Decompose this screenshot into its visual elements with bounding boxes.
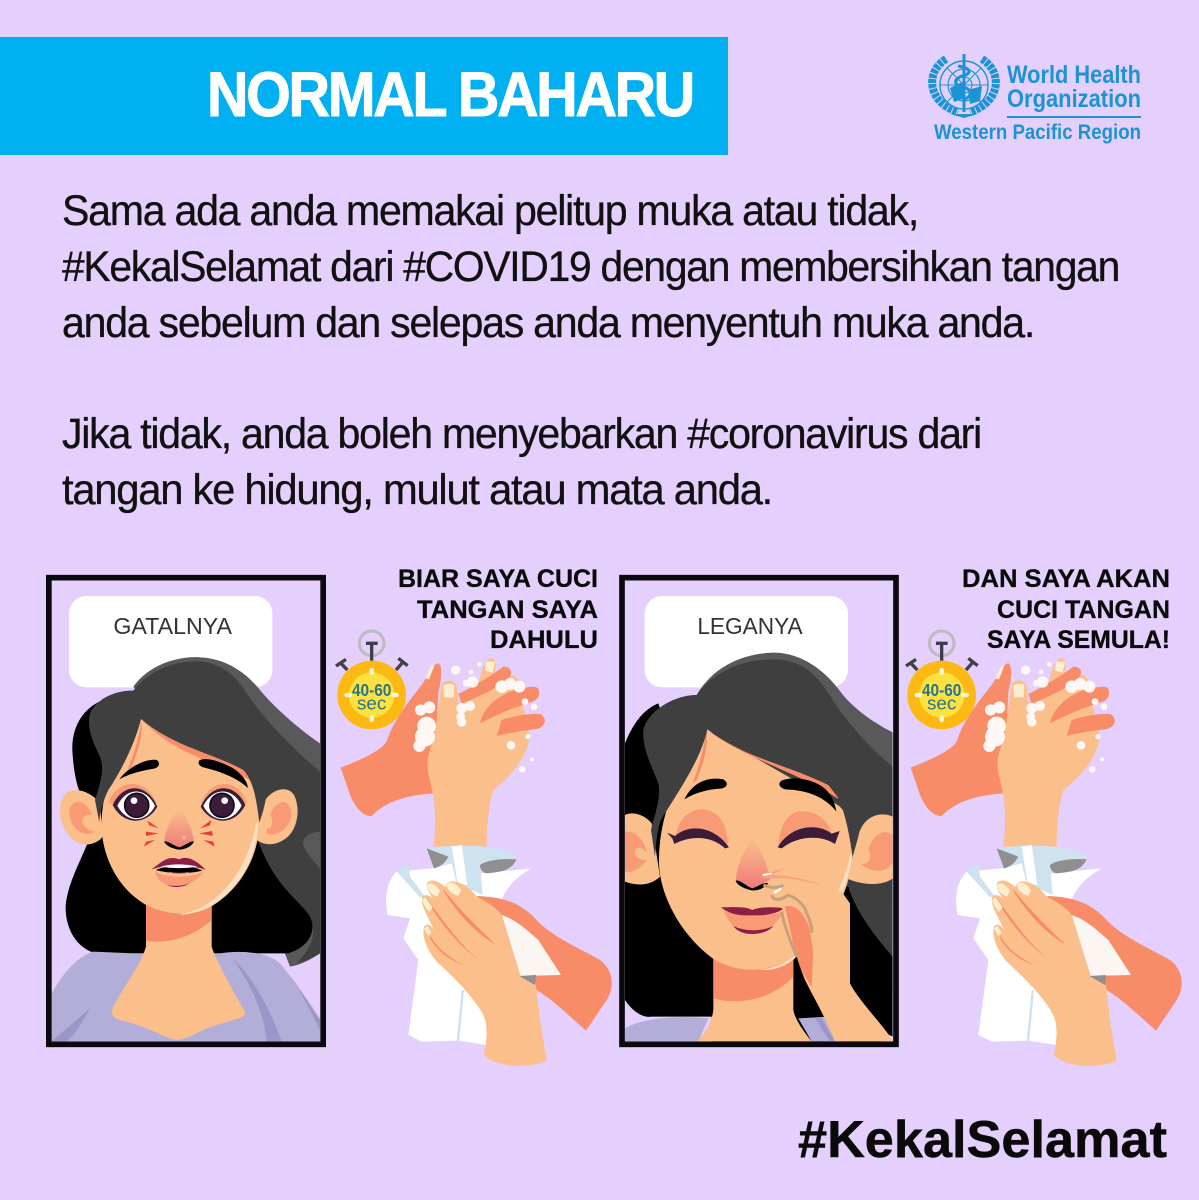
nose — [736, 844, 770, 890]
front hair — [643, 695, 868, 857]
speech bubble: GATALNYA — [113, 613, 233, 639]
icon: WHO emblem — [932, 54, 996, 118]
logo text: Organization — [1007, 85, 1141, 113]
caption: wash first: BIAR SAYA CUCI — [398, 565, 598, 593]
icon: timer: 40-60 — [352, 680, 391, 700]
caption: wash again: DAN SAYA AKAN — [962, 565, 1170, 593]
caption: wash first: TANGAN SAYA — [417, 596, 598, 624]
panel: relieved face — [622, 578, 896, 1044]
frame — [49, 578, 323, 1044]
body text — [62, 187, 1119, 514]
smile — [721, 907, 784, 934]
icon: timer — [336, 631, 408, 729]
caption: wash again: SAYA SEMULA! — [987, 626, 1170, 654]
icon: handwashing and drying, first — [336, 631, 612, 1066]
hair — [66, 657, 320, 967]
ears — [60, 789, 298, 844]
WHO logo — [932, 54, 1141, 144]
logo text: Western Pacific Region — [934, 121, 1141, 144]
panel: itchy face — [49, 578, 323, 1044]
hand touching nose — [762, 867, 893, 1041]
speech bubble — [645, 596, 848, 687]
eyebrows — [684, 778, 836, 811]
hashtag: #KekalSelamat — [798, 1111, 1167, 1169]
nose — [164, 813, 194, 850]
body text: Sama ada anda memakai pelitup muka atau tidak, — [62, 187, 918, 235]
caption: wash again: CUCI TANGAN — [997, 596, 1170, 624]
title: NORMAL BAHARU — [207, 60, 693, 130]
speech bubble — [69, 596, 272, 687]
speech bubble: LEGANYA — [697, 613, 803, 639]
neck and shirt — [52, 903, 320, 1041]
frame — [622, 578, 896, 1044]
eyes — [108, 784, 247, 821]
caption: wash first: DAHULU — [490, 626, 598, 654]
ears — [625, 813, 893, 884]
title banner — [0, 37, 728, 155]
hair — [625, 653, 893, 1041]
face — [659, 729, 852, 970]
icon: timer: sec — [927, 692, 956, 713]
icon: timer: sec — [357, 692, 386, 713]
logo text: World Health — [1007, 61, 1141, 89]
icon: timer: 40-60 — [922, 680, 961, 700]
body text: #KekalSelamat dari #COVID19 dengan membersihkan tangan — [62, 243, 1119, 291]
front hair — [89, 690, 268, 822]
caption: wash again — [962, 565, 1170, 654]
body text: Jika tidak, anda boleh menyebarkan #coronavirus dari — [62, 410, 981, 458]
caption: wash first — [398, 565, 598, 654]
itch marks — [144, 820, 215, 847]
body text: tangan ke hidung, mulut atau mata anda. — [62, 466, 772, 514]
closed eyes — [667, 809, 840, 848]
body text: anda sebelum dan selepas anda menyentuh muka anda. — [62, 299, 1034, 347]
neck and shirt — [625, 953, 893, 1041]
eyebrows — [119, 759, 248, 788]
face — [102, 719, 259, 914]
icon: handwashing and drying, second — [906, 631, 1182, 1066]
logo text — [934, 61, 1141, 144]
icon: timer — [906, 631, 978, 729]
mouth — [152, 858, 206, 887]
